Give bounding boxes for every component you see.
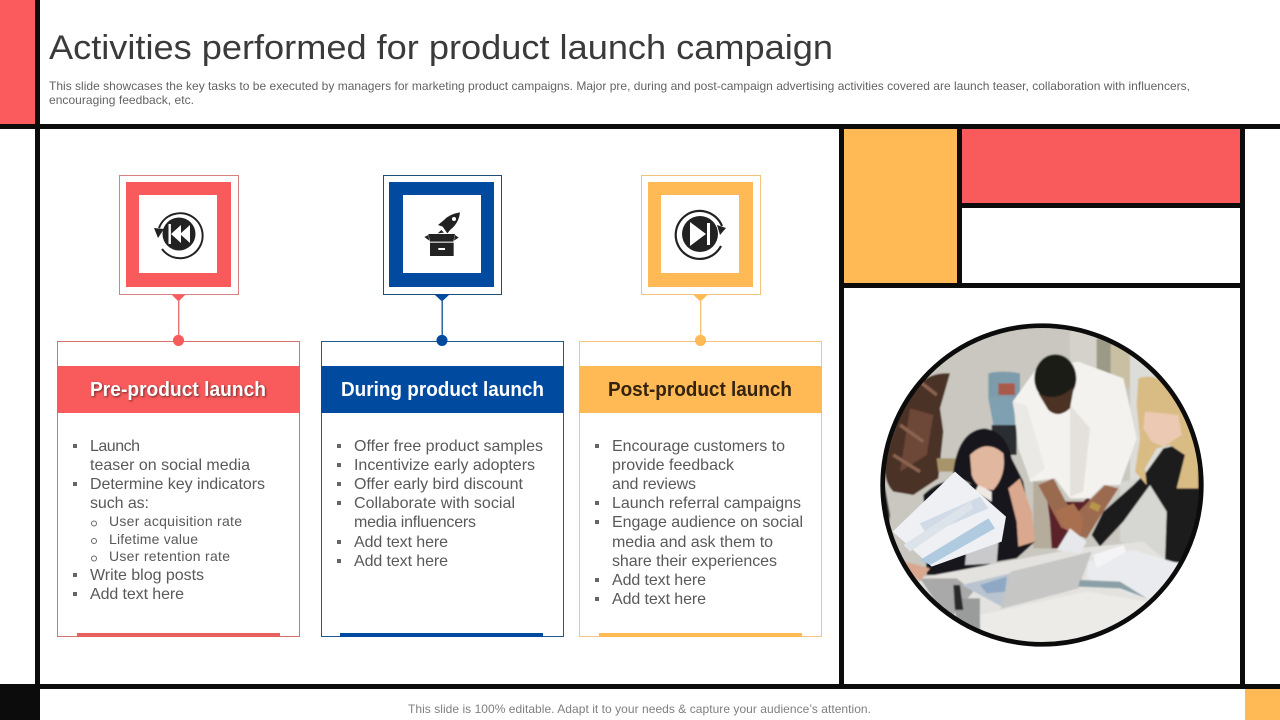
list: post tasks: provide feedback (612, 457, 735, 474)
heading: during product launch: During product launch (341, 379, 544, 401)
list: during tasks: Offer free product samples (354, 438, 543, 455)
list: pre-product tasks: Lifetime value (109, 531, 198, 547)
list: during tasks: Incentivize early adopters (354, 457, 535, 474)
list: post tasks: Add text here (612, 572, 706, 589)
accent block: bottom-right orange (1245, 689, 1280, 720)
list: post tasks (595, 438, 803, 608)
list: during tasks: Add text here (354, 553, 448, 570)
heading: pre-product launch: Pre-product launch (90, 379, 266, 401)
list: pre-product tasks: Add text here (90, 586, 184, 603)
list: pre-product tasks: Write blog posts (90, 567, 204, 584)
list: pre-product tasks: User acquisition rate (109, 513, 242, 529)
accent block: orange (844, 129, 957, 283)
photo: team reviewing documents at a laptop (880, 323, 1204, 647)
card: post-product launch (579, 335, 822, 637)
list: pre-product tasks: Determine key indicators (90, 476, 265, 493)
connector: pre-product (172, 294, 186, 346)
icon tile: rewind (120, 176, 238, 294)
list: post tasks: media and ask them to (612, 534, 773, 551)
icon tile: fast forward (642, 176, 760, 294)
icon tile: rocket from box (384, 176, 502, 294)
heading: post-product launch: Post-product launch (608, 379, 792, 401)
accent block: top-left red (0, 0, 35, 124)
description text: This slide showcases the key tasks to be executed by managers for marketing product campaigns. Major pre, during and post-campaign advertising activities covered are launch teaser, collaboration with influencers, (49, 79, 1190, 93)
card: pre-product launch (57, 335, 300, 637)
list: during tasks (337, 438, 543, 570)
list: during tasks: Collaborate with social (354, 495, 515, 512)
list: during tasks: media influencers (354, 514, 476, 531)
list: post tasks: Encourage customers to (612, 438, 785, 455)
list: post tasks: Launch referral campaigns (612, 495, 801, 512)
card: during product launch (321, 335, 564, 637)
panel: pre-product launch (57, 176, 300, 637)
description text (49, 79, 1190, 107)
list: during tasks: Offer early bird discount (354, 476, 524, 493)
accent block: bottom-left black (0, 684, 40, 720)
list: post tasks: Engage audience on social (612, 514, 803, 531)
list: post tasks: share their experiences (612, 553, 777, 570)
list: pre-product tasks: teaser on social media (90, 457, 250, 474)
list: during tasks: Add text here (354, 534, 448, 551)
list: pre-product tasks (73, 438, 265, 603)
list: pre-product tasks: Launch (90, 438, 140, 455)
accent block: red banner (962, 129, 1240, 203)
description text: encouraging feedback, etc. (49, 93, 194, 107)
list: pre-product tasks: User retention rate (109, 548, 230, 564)
panel: during product launch (321, 176, 564, 637)
title: Activities performed for product launch campaign (49, 29, 833, 67)
list: post tasks: Add text here (612, 591, 706, 608)
list: pre-product tasks: such as: (90, 495, 149, 512)
list: post tasks: and reviews (612, 476, 696, 493)
connector: post (693, 294, 708, 346)
footer note: This slide is 100% editable. Adapt it to your needs & capture your audience’s attention. (408, 702, 871, 716)
panel: post-product launch (579, 176, 822, 637)
connector: during (434, 294, 450, 346)
